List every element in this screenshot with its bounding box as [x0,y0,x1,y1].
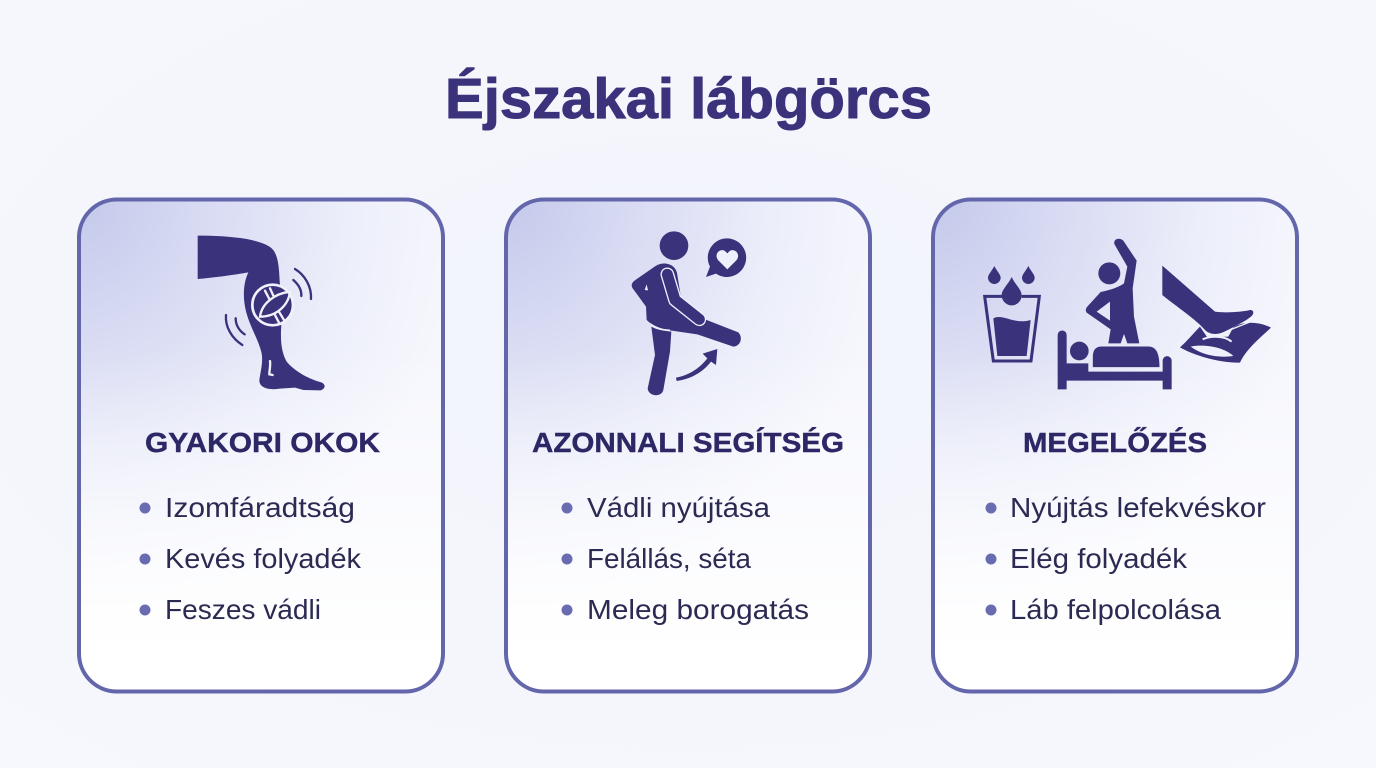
bullet list: immediate help [562,492,809,625]
icon: stretching person in bed [1058,239,1172,389]
bullet list: prevention [986,492,1266,625]
bullet list: immediate help: Meleg borogatás [587,594,809,625]
icon: foot on pillow [1162,266,1271,363]
bullet list: immediate help: Vádli nyújtása [587,492,771,523]
bullet list: causes: Kevés folyadék [165,543,361,574]
bullet list: prevention: Láb felpolcolása [1010,594,1222,625]
heading: causes: GYAKORI OKOK [145,427,380,458]
bullet list: causes: Izomfáradtság [165,492,355,523]
bullet list: prevention: Elég folyadék [1010,543,1187,574]
icon: calf stretch [632,231,746,395]
heading: prevention: MEGELŐZÉS [1023,427,1207,458]
panel: immediate help [506,200,870,692]
bullet list: prevention: Nyújtás lefekvéskor [1010,492,1266,523]
bullet list: immediate help: Felállás, séta [587,543,752,574]
panel: causes [79,200,443,692]
panel: prevention [933,200,1297,692]
icon: leg with cramp [198,236,325,390]
bullet list: causes [140,492,361,625]
title: Éjszakai lábgörcs [445,67,932,131]
bullet list: causes: Feszes vádli [165,594,321,625]
icon: glass of water [985,266,1039,361]
heading: immediate help: AZONNALI SEGÍTSÉG [532,427,844,458]
